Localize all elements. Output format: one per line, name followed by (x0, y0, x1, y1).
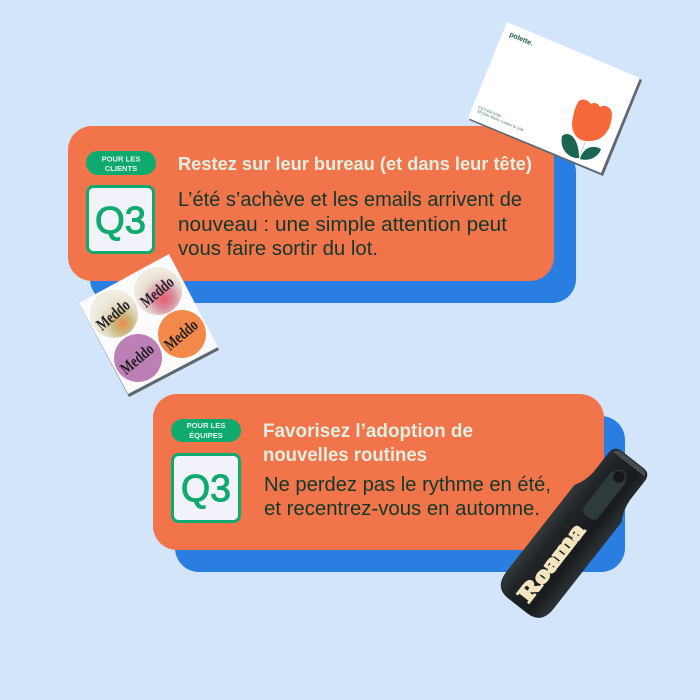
panel: clients (68, 126, 576, 303)
Q3 tile (172, 454, 240, 522)
postcard logo: polette. (508, 31, 534, 48)
postcard address: 0123 456 0789 (478, 105, 501, 118)
badge: pour les clients (86, 151, 156, 175)
badge: pour les clients: POUR LES (102, 154, 140, 164)
badge: pour les equipes: POUR LES (187, 421, 225, 430)
Q3 tile: Q3 (181, 468, 231, 510)
heading: Favorisez l’adoption de (263, 421, 473, 442)
orange card (68, 126, 554, 281)
sticker 2: Meddo (136, 272, 178, 311)
body text: Ne perdez pas le rythme en été, (264, 474, 551, 496)
postcard with tulip (468, 22, 642, 176)
postcard address: 58 Chez Bistro, London W 1AB (477, 109, 525, 133)
heading: Restez sur leur bureau (et dans leur tête) (178, 154, 532, 174)
badge: pour les equipes (171, 419, 241, 442)
Q3 tile (88, 186, 154, 252)
panel: equipes (153, 394, 625, 572)
body text: vous faire sortir du lot. (178, 238, 378, 260)
bottle button (610, 468, 628, 486)
orange card (153, 394, 604, 550)
body text (264, 474, 551, 520)
body text: L’été s’achève et les emails arrivent de (178, 189, 522, 211)
sticker sheet (79, 254, 219, 397)
badge: pour les equipes: ÉQUIPES (189, 431, 223, 440)
body text (178, 189, 522, 260)
sticker 3: Meddo (160, 315, 202, 354)
Q3 tile: Q3 (95, 200, 146, 242)
heading: nouvelles routines (263, 445, 427, 466)
heading (263, 421, 473, 466)
body text: et recentrez-vous en automne. (264, 498, 540, 520)
bottle label: Roama (513, 518, 590, 606)
badge: pour les clients: CLIENTS (105, 164, 137, 173)
bottle (494, 441, 656, 624)
blue card shadow (90, 148, 576, 303)
bottle cap (613, 448, 648, 477)
icon: tulip (561, 100, 612, 160)
blue card shadow (175, 416, 625, 572)
bottle strap (580, 471, 626, 522)
body text: nouveau : une simple attention peut (178, 214, 507, 236)
bottle body (494, 441, 656, 624)
sticker 4: Meddo (116, 339, 158, 378)
sticker 1: Meddo (92, 295, 134, 334)
